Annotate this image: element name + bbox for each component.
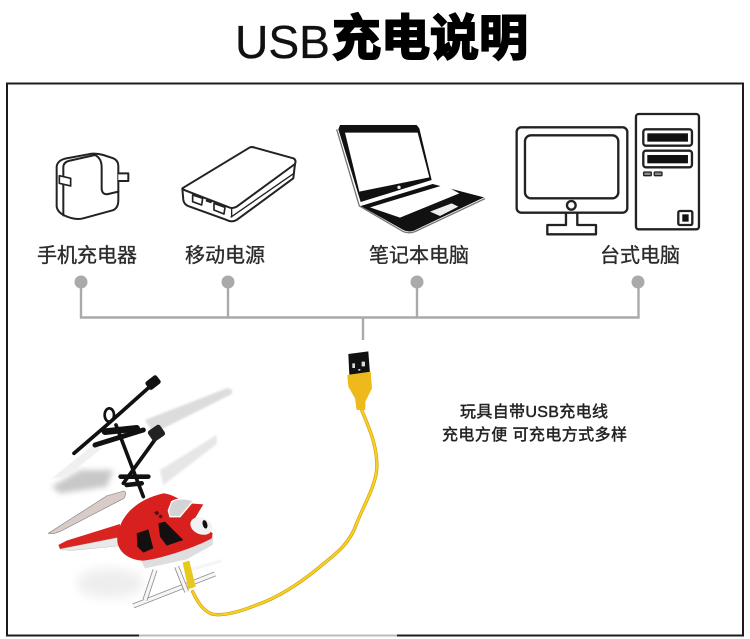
fuselage (140, 535, 213, 568)
device labels (37, 244, 680, 267)
lower blade (48, 491, 126, 534)
tail boom (58, 524, 120, 549)
description text (442, 403, 627, 444)
device labels: 台式电脑 (600, 244, 680, 267)
windshield (168, 499, 193, 517)
device labels: 移动电源 (185, 244, 265, 267)
description text: 充电方便 可充电方式多样 (442, 426, 627, 444)
title: USB (235, 16, 330, 68)
eye (188, 514, 215, 538)
icon: laptop (337, 125, 485, 233)
rotor assembly (74, 374, 166, 497)
usb plug (347, 351, 372, 410)
skids (133, 561, 222, 606)
charging plug (183, 561, 196, 589)
title: 充电说明 (332, 0, 528, 70)
usb cable (193, 351, 377, 615)
cabin windows (137, 529, 153, 553)
blade shadows (52, 388, 232, 598)
title (235, 0, 528, 70)
helicopter toy (48, 374, 232, 606)
icon: desktop computer (517, 114, 699, 234)
description text: 玩具自带USB充电线 (460, 403, 608, 421)
device labels: 笔记本电脑 (369, 244, 469, 267)
connector lines and dots (74, 276, 644, 340)
icon: phone charger (57, 154, 128, 219)
icon: power bank (182, 147, 296, 221)
device labels: 手机充电器 (37, 244, 137, 267)
